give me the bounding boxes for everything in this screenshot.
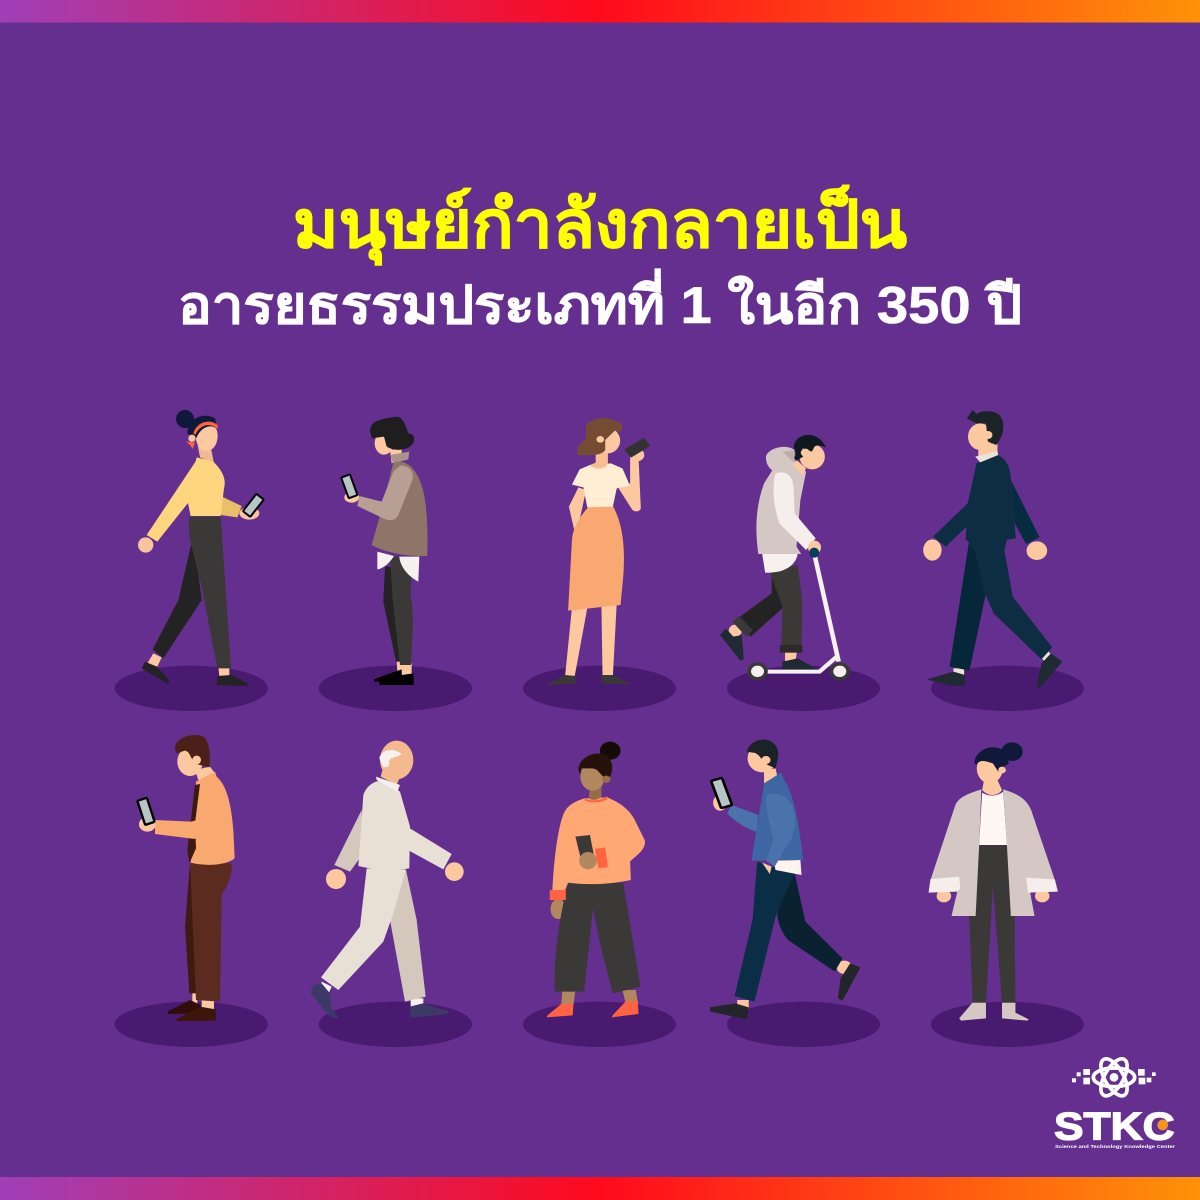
title line 1: มนุษย์กำลังกลายเป็น: [293, 184, 907, 266]
logo wordmark: STKC: [1054, 1105, 1175, 1149]
shadow: [319, 1002, 472, 1047]
title: [178, 184, 1022, 335]
title line 2: อารยธรรมประเภทที่ 1 ในอีก 350 ปี: [178, 269, 1022, 335]
person 10: woman in beige cardigan: [929, 742, 1084, 1047]
person 1: woman in yellow top with phone: [115, 410, 268, 711]
scooter: [749, 557, 848, 679]
logo tagline: Science and Technology Knowledge Center: [1055, 1144, 1175, 1150]
person 9: man in blue jacket with phone: [710, 740, 880, 1047]
person 7: elderly man in cream suit walking: [311, 741, 472, 1047]
icon: pixel squares: [1072, 1069, 1156, 1084]
bottom gradient bar: [0, 1177, 1200, 1200]
person 3: woman in orange skirt on phone: [523, 418, 676, 711]
shadow: [523, 666, 676, 711]
shadow: [727, 666, 880, 711]
logo: STKC: [1054, 1055, 1175, 1150]
shadow: [931, 666, 1084, 711]
person 4: person on kick scooter: [720, 435, 880, 711]
logo orange dot: [1157, 1120, 1168, 1130]
person 2: person in brown vest with phone: [319, 417, 472, 711]
icon: atom: [1093, 1055, 1135, 1100]
shadow: [115, 1002, 268, 1047]
top gradient bar: [0, 0, 1200, 22]
shadow: [931, 1002, 1084, 1047]
shadow: [523, 1002, 676, 1047]
person 6: man in orange shirt and tie with phone: [115, 735, 268, 1047]
shadow: [727, 1002, 880, 1047]
shadow: [319, 666, 472, 711]
person 8: woman in orange sweater: [523, 742, 676, 1047]
shadow: [115, 666, 268, 711]
person 5: man in navy suit walking: [923, 410, 1084, 711]
